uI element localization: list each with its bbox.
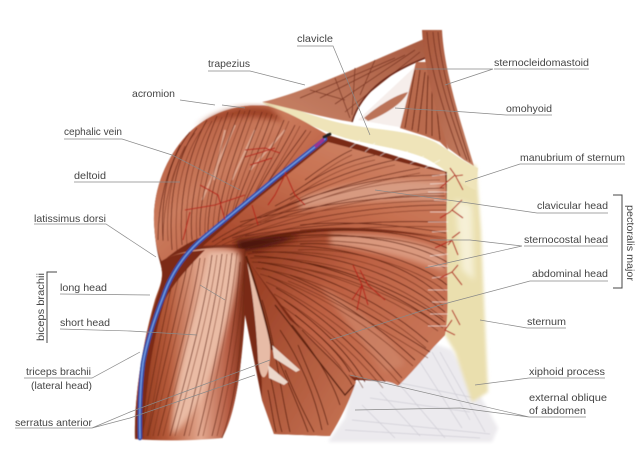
left labels: cephalic vein xyxy=(64,126,122,138)
right labels: external oblique xyxy=(529,392,607,404)
dark muscle underlay xyxy=(135,105,447,439)
leader lines xyxy=(15,46,625,428)
left labels: acromion xyxy=(132,88,175,100)
sternocleidomastoid xyxy=(422,30,474,166)
right labels: abdominal head xyxy=(532,268,608,280)
pectoralis major bracket: pectoralis major xyxy=(624,205,636,282)
pectoralis major clavicular head xyxy=(203,142,447,252)
white abdominal fascia xyxy=(328,338,498,442)
left labels: triceps brachii xyxy=(26,366,91,378)
serratus anterior and latissimus xyxy=(246,256,356,436)
sternocleidomastoid clavicular head xyxy=(400,62,448,150)
right labels: xiphoid process xyxy=(529,366,605,378)
left labels: short head xyxy=(60,317,110,329)
left labels xyxy=(15,33,333,429)
frayed muscle edges xyxy=(350,140,448,326)
left labels: (lateral head) xyxy=(31,380,92,392)
right labels: sternocleidomastoid xyxy=(494,57,589,69)
sternum highlights xyxy=(455,200,474,280)
left labels: clavicle xyxy=(297,33,333,45)
neck white triangle xyxy=(358,62,420,128)
left labels: serratus anterior xyxy=(15,417,93,429)
right labels: omohyoid xyxy=(506,103,552,115)
anatomical illustration xyxy=(135,30,498,442)
arteries xyxy=(183,148,463,335)
right labels xyxy=(494,57,625,417)
right labels: sternum xyxy=(527,316,566,328)
clavicle xyxy=(262,103,478,190)
pectoralis major bracket xyxy=(613,195,636,288)
left labels: long head xyxy=(60,282,107,294)
biceps brachii bracket: biceps brachii xyxy=(35,273,47,341)
right labels: clavicular head xyxy=(537,200,608,212)
biceps and triceps arm xyxy=(135,248,245,440)
omohyoid xyxy=(364,92,408,121)
trapezius xyxy=(262,39,426,122)
left labels: latissimus dorsi xyxy=(34,213,106,225)
left labels: deltoid xyxy=(74,170,106,182)
pectoralis major sternocostal and abdominal heads xyxy=(240,230,448,388)
sternum xyxy=(445,165,488,402)
cephalic vein xyxy=(140,134,330,438)
right labels: sternocostal head xyxy=(524,234,608,246)
right labels: manubrium of sternum xyxy=(520,152,625,164)
biceps brachii bracket xyxy=(35,272,57,343)
right labels: of abdomen xyxy=(529,405,586,417)
left labels: trapezius xyxy=(208,58,250,70)
deltoid xyxy=(154,105,328,262)
